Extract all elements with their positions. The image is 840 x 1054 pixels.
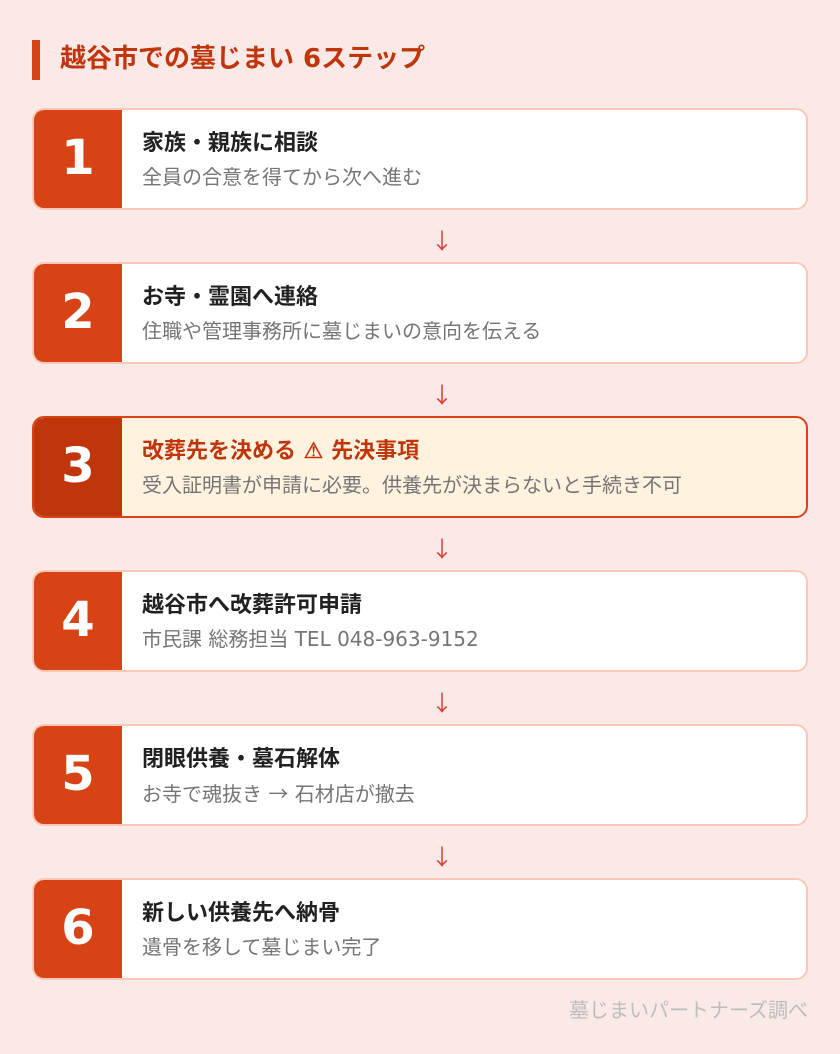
step number 4: 4 (61, 592, 95, 648)
step 4 card (32, 570, 808, 672)
arrow 1 to 2: ↓ (431, 224, 453, 256)
step number 6: 6 (61, 900, 95, 956)
title: 越谷市での墓じまい 6ステップ (60, 44, 425, 74)
step number 1 (34, 110, 122, 208)
step 2 card (32, 262, 808, 364)
step number 4 (34, 572, 122, 670)
step number 3: 3 (61, 438, 95, 494)
title (32, 40, 808, 80)
step 4 heading: 越谷市へ改葬許可申請 (142, 593, 362, 618)
arrow 2 to 3: ↓ (431, 378, 453, 410)
step 1 card (32, 108, 808, 210)
arrow 3 to 4: ↓ (431, 532, 453, 564)
step 2 heading: お寺・霊園へ連絡 (142, 285, 318, 310)
step number 1: 1 (61, 130, 95, 186)
step 5 description: お寺で魂抜き → 石材店が撤去 (142, 778, 415, 807)
step 6 card (32, 878, 808, 980)
step number 5: 5 (61, 746, 95, 802)
step 3 description: 受入証明書が申請に必要。供養先が決まらないと手続き不可 (142, 473, 682, 497)
source note: 墓じまいパートナーズ調べ (569, 998, 808, 1022)
step 5 card (32, 724, 808, 826)
step number 3 (34, 418, 122, 516)
step 1 description: 全員の合意を得てから次へ進む (142, 165, 422, 189)
step 6 description: 遺骨を移して墓じまい完了 (142, 935, 381, 959)
step 4 description: 市民課 総務担当 TEL 048-963-9152 (142, 627, 479, 651)
step number 2: 2 (61, 284, 95, 340)
arrow 4 to 5: ↓ (431, 686, 453, 718)
step 6 heading: 新しい供養先へ納骨 (142, 901, 340, 926)
arrow 5 to 6: ↓ (431, 840, 453, 872)
step 5 heading: 閉眼供養・墓石解体 (142, 747, 340, 772)
step 3 card highlighted (32, 416, 808, 518)
step 2 description: 住職や管理事務所に墓じまいの意向を伝える (142, 319, 541, 343)
step number 6 (34, 880, 122, 978)
step number 2 (34, 264, 122, 362)
step 3 heading: 改葬先を決める ⚠ 先決事項 (142, 439, 419, 464)
step number 5 (34, 726, 122, 824)
step 1 heading: 家族・親族に相談 (142, 131, 318, 156)
